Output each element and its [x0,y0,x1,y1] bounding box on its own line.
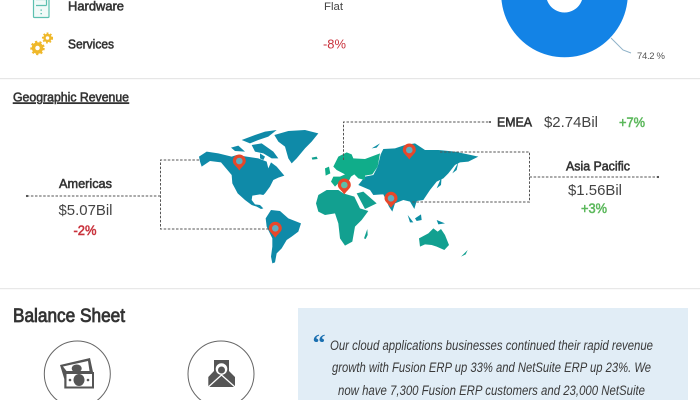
map: Asia [358,143,478,224]
region: EMEA [497,114,645,131]
hardware change: Flat [324,1,343,13]
map: South America [266,210,301,263]
panel: revenue by business [31,0,346,54]
map: Arctic islands [231,130,278,160]
Asia Pacific revenue: $1.56Bil [568,182,622,199]
map: Eastern hemisphere [316,143,478,257]
services label: Services [68,36,114,52]
world map [199,130,478,263]
heading: balance sheet: Balance Sheet [13,306,126,327]
Americas revenue: $5.07Bil [58,202,112,219]
region: Americas [58,176,112,238]
heading: geographic revenue: Geographic Revenue [13,90,129,104]
EMEA change: +7% [619,115,645,130]
donut leader line [611,38,631,53]
donut chart [501,0,666,62]
icon: money envelope in circle [188,341,254,400]
services change: -8% [323,36,346,52]
map: Europe [325,152,380,187]
map: Americas [199,130,318,263]
pin: North America [233,154,246,170]
region: Asia Pacific [566,158,630,216]
icon: quotation mark: “ [312,331,326,357]
panel: quote [298,308,688,400]
map: Greenland [274,130,318,163]
icon: hardware [34,0,49,18]
pin: Russia [403,144,416,160]
pin: South America [269,222,282,238]
map: North America [199,152,284,209]
donut value label: 74.2 % [637,51,666,62]
icon: cash in circle [44,341,110,400]
EMEA revenue: $2.74Bil [544,114,598,131]
quote line 3: now have 7,300 Fusion ERP customers and 23,000 NetSuite [338,383,645,398]
Americas change: -2% [74,223,96,238]
region: Asia Pacific: Asia Pacific [566,158,630,174]
map: Africa and Middle East [316,190,468,257]
connector: Americas [26,160,270,229]
region: Americas: Americas [59,176,112,191]
pin: Europe [338,178,351,194]
connector: Asia Pacific [412,152,659,202]
region: EMEA: EMEA [497,114,532,130]
Asia Pacific change: +3% [581,201,607,216]
pin: India [384,192,398,208]
connector: EMEA [344,121,491,160]
icon: services gears [31,33,52,54]
